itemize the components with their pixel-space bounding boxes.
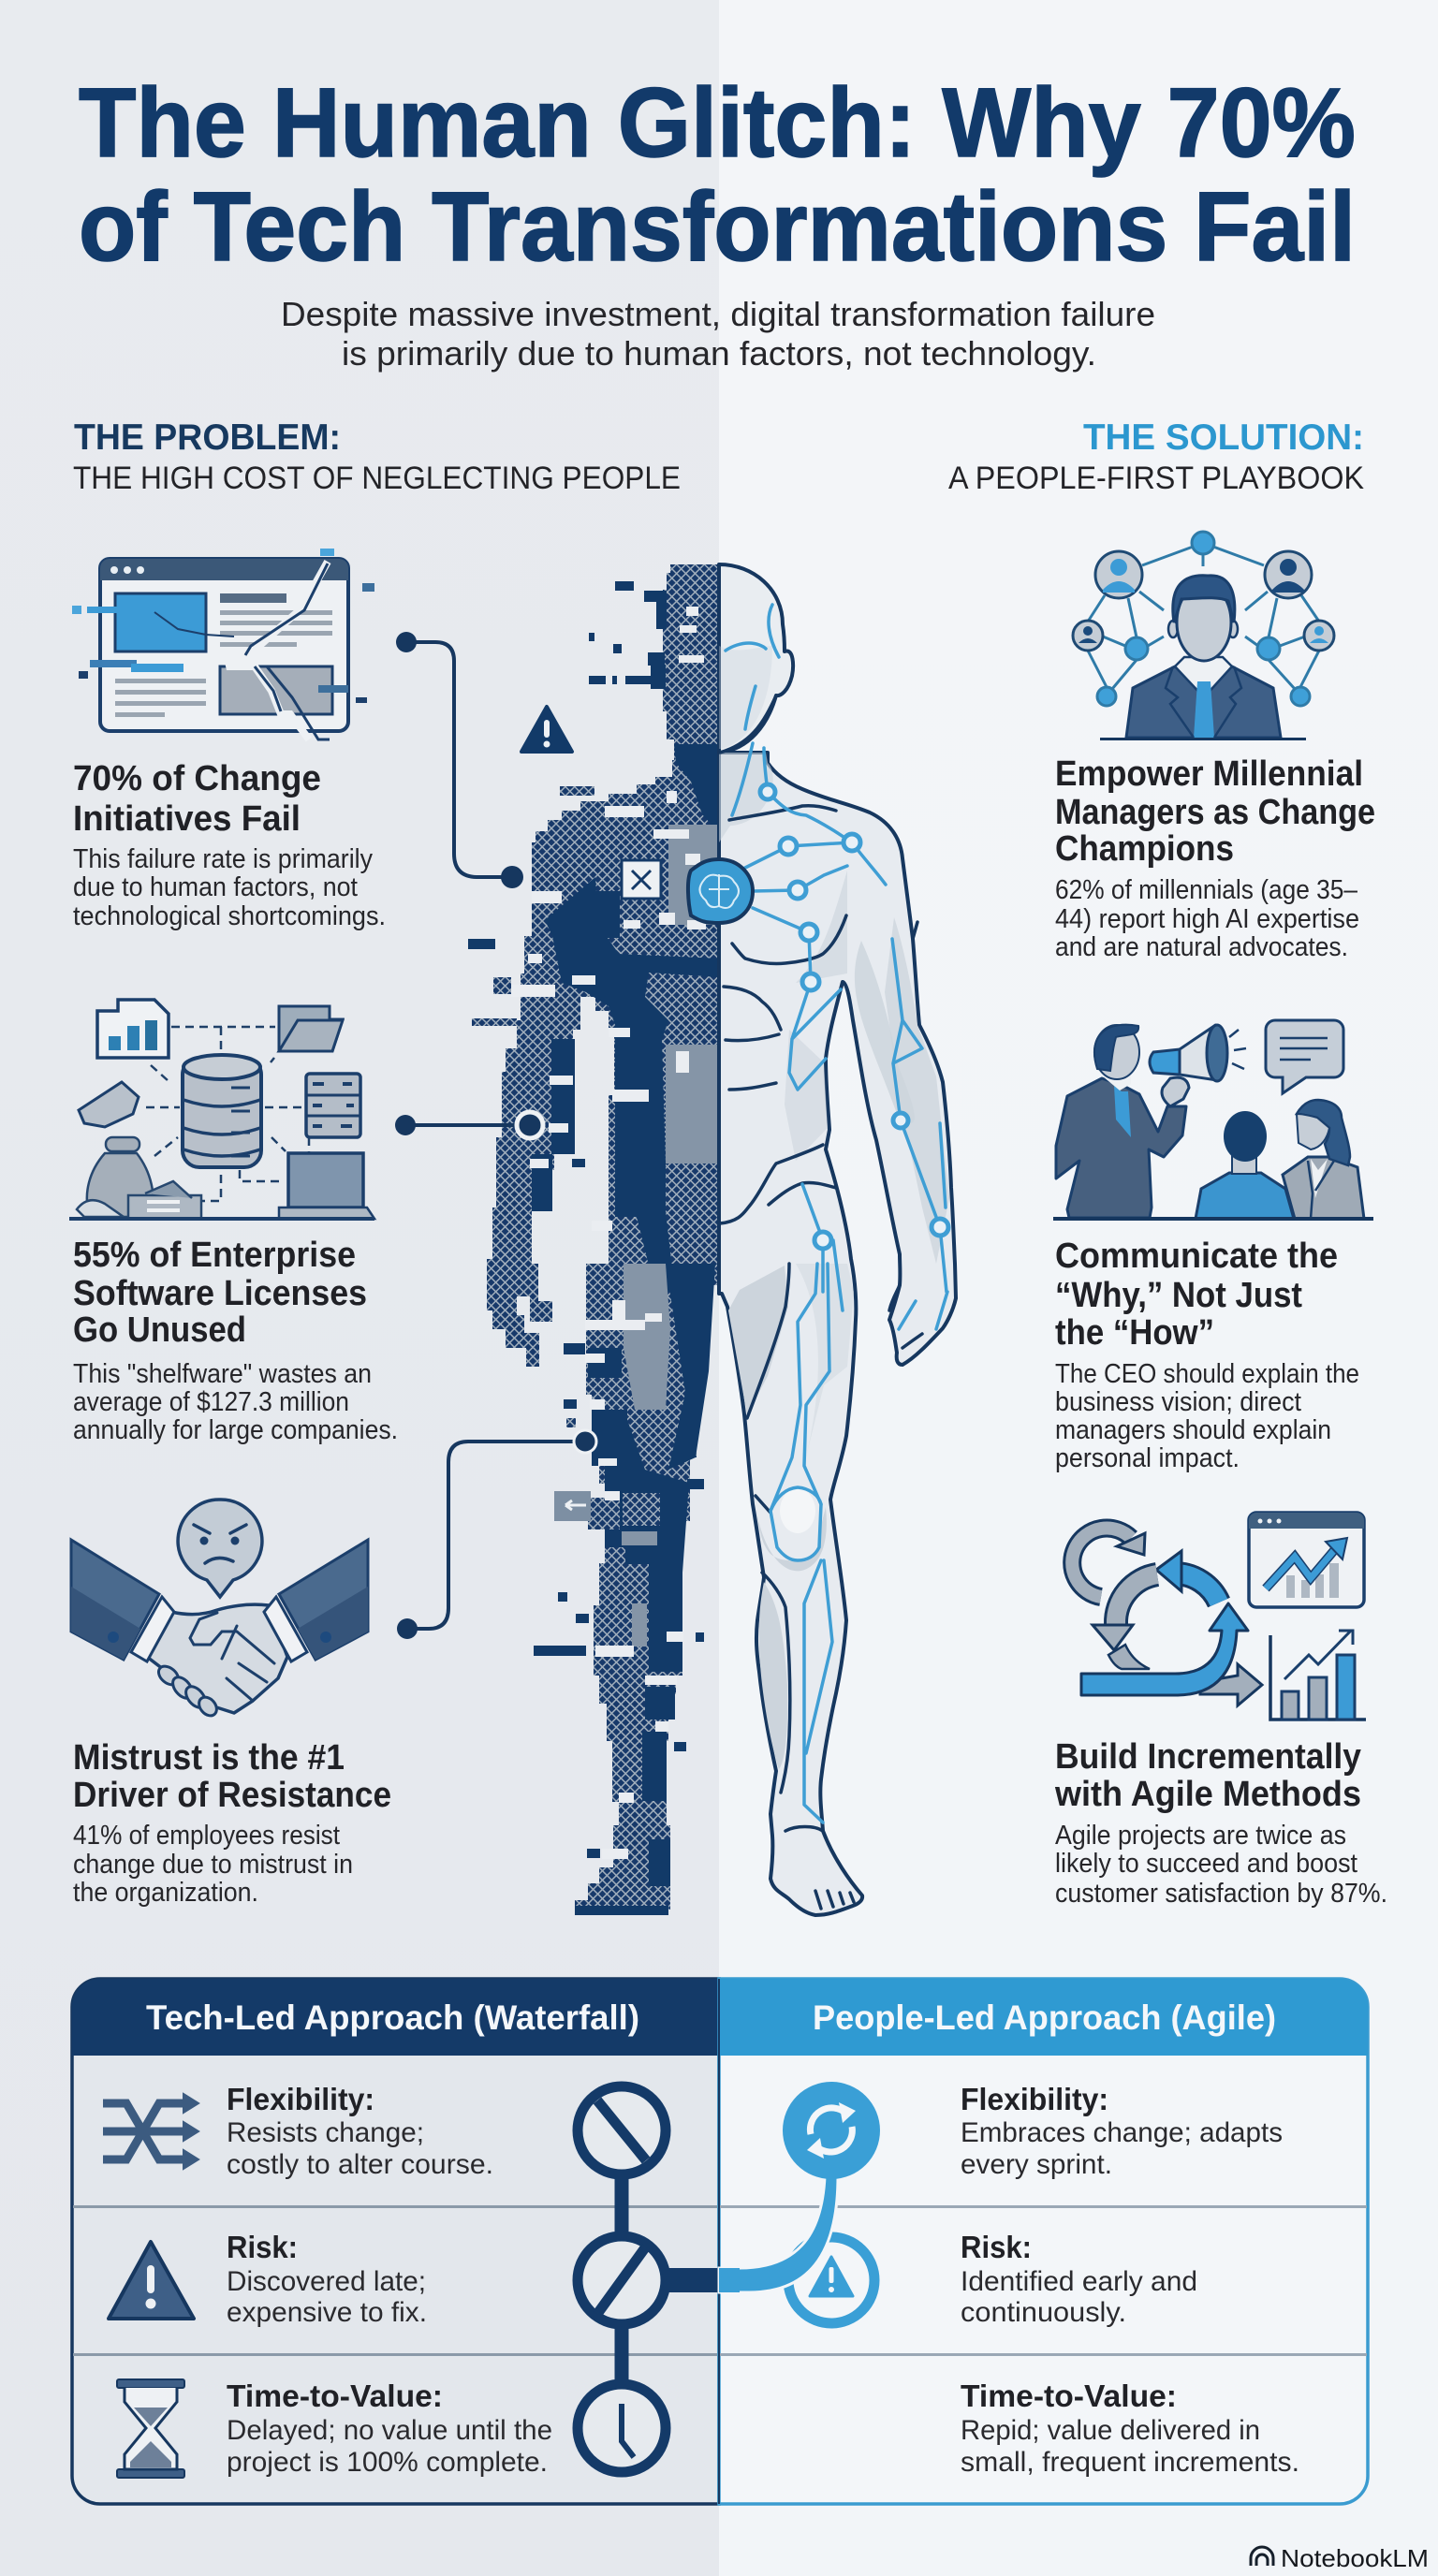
heading: the solution — [948, 417, 1364, 496]
text: 41% resist — [73, 1821, 353, 1908]
text: flexibility, tech-led: costly to alter course. — [227, 2149, 493, 2180]
text: agile success: customer satisfaction by 87%. — [1055, 1879, 1387, 1909]
text: risk, tech-led — [227, 2230, 427, 2328]
text: flexibility, people-led: every sprint. — [961, 2149, 1112, 2180]
text: flexibility, tech-led: Flexibility: — [227, 2082, 374, 2116]
panel: solution 3, agile methods — [1054, 1513, 1387, 1909]
text: failure rate: This failure rate is primarily — [73, 844, 374, 874]
icon: warning triangle — [521, 707, 572, 752]
panel: solution 1, millennial managers — [1055, 532, 1375, 962]
heading: mistrust — [73, 1738, 391, 1815]
text: agile success: likely to succeed and boost — [1055, 1849, 1357, 1879]
icon: small arrow tile — [554, 1491, 591, 1521]
heading: communicate the why — [1055, 1237, 1338, 1353]
icon: manager with network — [1073, 532, 1334, 740]
title: of Tech Transformations Fail — [79, 172, 1356, 282]
heading: the problem: THE PROBLEM: — [74, 417, 341, 458]
text: flexibility, people-led: Embraces change; adapts — [961, 2117, 1283, 2148]
panel: problem 1, change initiatives fail — [72, 549, 386, 931]
text: time-to-value, people-led — [961, 2378, 1299, 2478]
icon: warning triangle — [109, 2242, 194, 2319]
text: flexibility, tech-led — [227, 2082, 493, 2180]
text: failure rate — [73, 844, 386, 931]
heading: 55% licenses unused: Go Unused — [73, 1310, 246, 1350]
text: agile success: Agile projects are twice as — [1055, 1821, 1346, 1851]
icon: hourglass — [117, 2379, 184, 2478]
heading: the problem: THE HIGH COST OF NEGLECTING PEOPLE — [73, 461, 681, 496]
text: flexibility, tech-led: Resists change; — [227, 2117, 424, 2148]
text: 41% resist: change due to mistrust in — [73, 1850, 353, 1880]
text: risk, people-led: Identified early and — [961, 2266, 1197, 2297]
heading: empower millennial managers: Champions — [1055, 829, 1234, 869]
text: failure rate: technological shortcomings. — [73, 901, 386, 931]
icon: tangled arrows — [103, 2094, 198, 2169]
heading: the problem — [73, 417, 681, 496]
heading: build incrementally: Build Incrementally — [1055, 1737, 1361, 1777]
text: time-to-value, tech-led — [227, 2378, 552, 2478]
text: flexibility, people-led — [961, 2082, 1283, 2180]
text: CEO explains vision — [1055, 1359, 1359, 1473]
text: risk, people-led — [961, 2230, 1197, 2328]
panel: people-led column — [718, 1979, 1368, 2504]
heading: communicate the why: “Why,” Not Just — [1055, 1276, 1302, 1315]
arrow: connector from mistrust to body — [397, 1430, 596, 1639]
text: CEO explains vision: personal impact. — [1055, 1443, 1240, 1473]
title — [79, 68, 1356, 282]
text: CEO explains vision: The CEO should explain the — [1055, 1359, 1359, 1389]
text: shelfware cost: annually for large companies. — [73, 1415, 398, 1445]
text: 62% of millennials — [1055, 875, 1359, 962]
header: tech-led approach: Tech-Led Approach (Waterfall) — [146, 1998, 639, 2037]
text: time-to-value, people-led: Repid; value delivered in — [961, 2415, 1260, 2446]
title: The Human Glitch: Why 70% — [79, 68, 1356, 178]
figure: healthy right half — [688, 564, 956, 1915]
icon: shelfware storage network — [69, 1000, 374, 1221]
heading: mistrust: Driver of Resistance — [73, 1776, 391, 1815]
text: failure rate: due to human factors, not — [73, 872, 358, 902]
heading: communicate the why: the “How” — [1055, 1313, 1214, 1353]
header: people-led approach: People-Led Approach (Agile) — [813, 1998, 1276, 2037]
text: shelfware cost — [73, 1359, 398, 1445]
text: agile success — [1055, 1821, 1387, 1909]
text: shelfware cost: This "shelfware" wastes an — [73, 1359, 372, 1389]
heading: 70% of change initiatives fail: Initiatives Fail — [73, 799, 301, 839]
subtitle: is primarily due to human factors, not technology. — [342, 334, 1096, 373]
icon: brain hub — [688, 859, 753, 923]
heading: build incrementally — [1054, 1737, 1361, 1814]
text: risk, tech-led: Discovered late; — [227, 2266, 426, 2297]
text: time-to-value, people-led: Time-to-Value: — [961, 2378, 1177, 2413]
heading: 55% licenses unused: 55% of Enterprise — [73, 1236, 356, 1275]
panel: solution 2, communicate the why — [1053, 1020, 1373, 1473]
heading: empower millennial managers: Managers as Change — [1055, 793, 1375, 832]
comparison table — [72, 1979, 1368, 2504]
text: flexibility, people-led: Flexibility: — [961, 2082, 1108, 2116]
text: time-to-value, tech-led: Delayed; no value until the — [227, 2415, 552, 2446]
heading: communicate the why: Communicate the — [1055, 1237, 1338, 1276]
icon: handshake with angry face — [71, 1500, 368, 1720]
heading: the solution: A PEOPLE-FIRST PLAYBOOK — [948, 461, 1364, 496]
text: risk, people-led: continuously. — [961, 2297, 1126, 2328]
figure: glitching left half — [468, 564, 719, 1915]
text: 62% of millennials: and are natural advocates. — [1055, 932, 1348, 962]
text: risk, tech-led: expensive to fix. — [227, 2297, 427, 2328]
text: 41% resist: the organization. — [73, 1878, 258, 1908]
panel: problem 3, mistrust — [71, 1500, 391, 1908]
logo: NotebookLM: NotebookLM — [1281, 2544, 1429, 2572]
text: CEO explains vision: managers should explain — [1055, 1415, 1331, 1445]
arrow: connector from failure rate to body — [396, 632, 523, 888]
text: shelfware cost: average of $127.3 million — [73, 1387, 349, 1417]
text: time-to-value, tech-led: Time-to-Value: — [227, 2378, 443, 2413]
subtitle — [281, 295, 1155, 373]
heading: 55% licenses unused — [73, 1236, 367, 1350]
text: time-to-value, people-led: small, frequent increments. — [961, 2447, 1299, 2478]
heading: build incrementally: with Agile Methods — [1054, 1775, 1361, 1814]
icon: agile loops and growth charts — [1072, 1513, 1366, 1720]
figure: half-glitched, half-healthy human — [468, 564, 956, 1915]
arrow: connector from licenses to body — [395, 1112, 543, 1138]
heading: mistrust: Mistrust is the #1 — [73, 1738, 345, 1778]
heading: 55% licenses unused: Software Licenses — [73, 1274, 367, 1313]
chart: blocked tech-led path — [578, 2086, 719, 2472]
heading: empower millennial managers: Empower Millennial — [1055, 754, 1363, 794]
panel: problem 2, unused licenses — [69, 1000, 398, 1445]
heading: empower millennial managers — [1055, 754, 1375, 869]
text: 62% of millennials: 44) report high AI expertise — [1055, 904, 1359, 934]
icon: cracked browser window — [72, 549, 374, 739]
text: 62% of millennials: 62% of millennials (age 35– — [1055, 875, 1357, 905]
heading: 70% of change initiatives fail: 70% of Change — [73, 759, 321, 798]
chart: flowing people-led path — [719, 2082, 880, 2323]
text: risk, tech-led: Risk: — [227, 2230, 298, 2264]
panel: tech-led column — [72, 1979, 719, 2504]
subtitle: Despite massive investment, digital transformation failure — [281, 295, 1155, 333]
icon: X error box — [622, 860, 661, 899]
text: 41% resist: 41% of employees resist — [73, 1821, 340, 1851]
heading: 70% of change initiatives fail — [73, 759, 321, 839]
text: CEO explains vision: business vision; direct — [1055, 1387, 1301, 1417]
icon: speaker with megaphone and audience — [1053, 1020, 1373, 1221]
text: time-to-value, tech-led: project is 100% complete. — [227, 2447, 548, 2478]
heading: the solution: THE SOLUTION: — [1083, 417, 1364, 458]
text: risk, people-led: Risk: — [961, 2230, 1032, 2264]
